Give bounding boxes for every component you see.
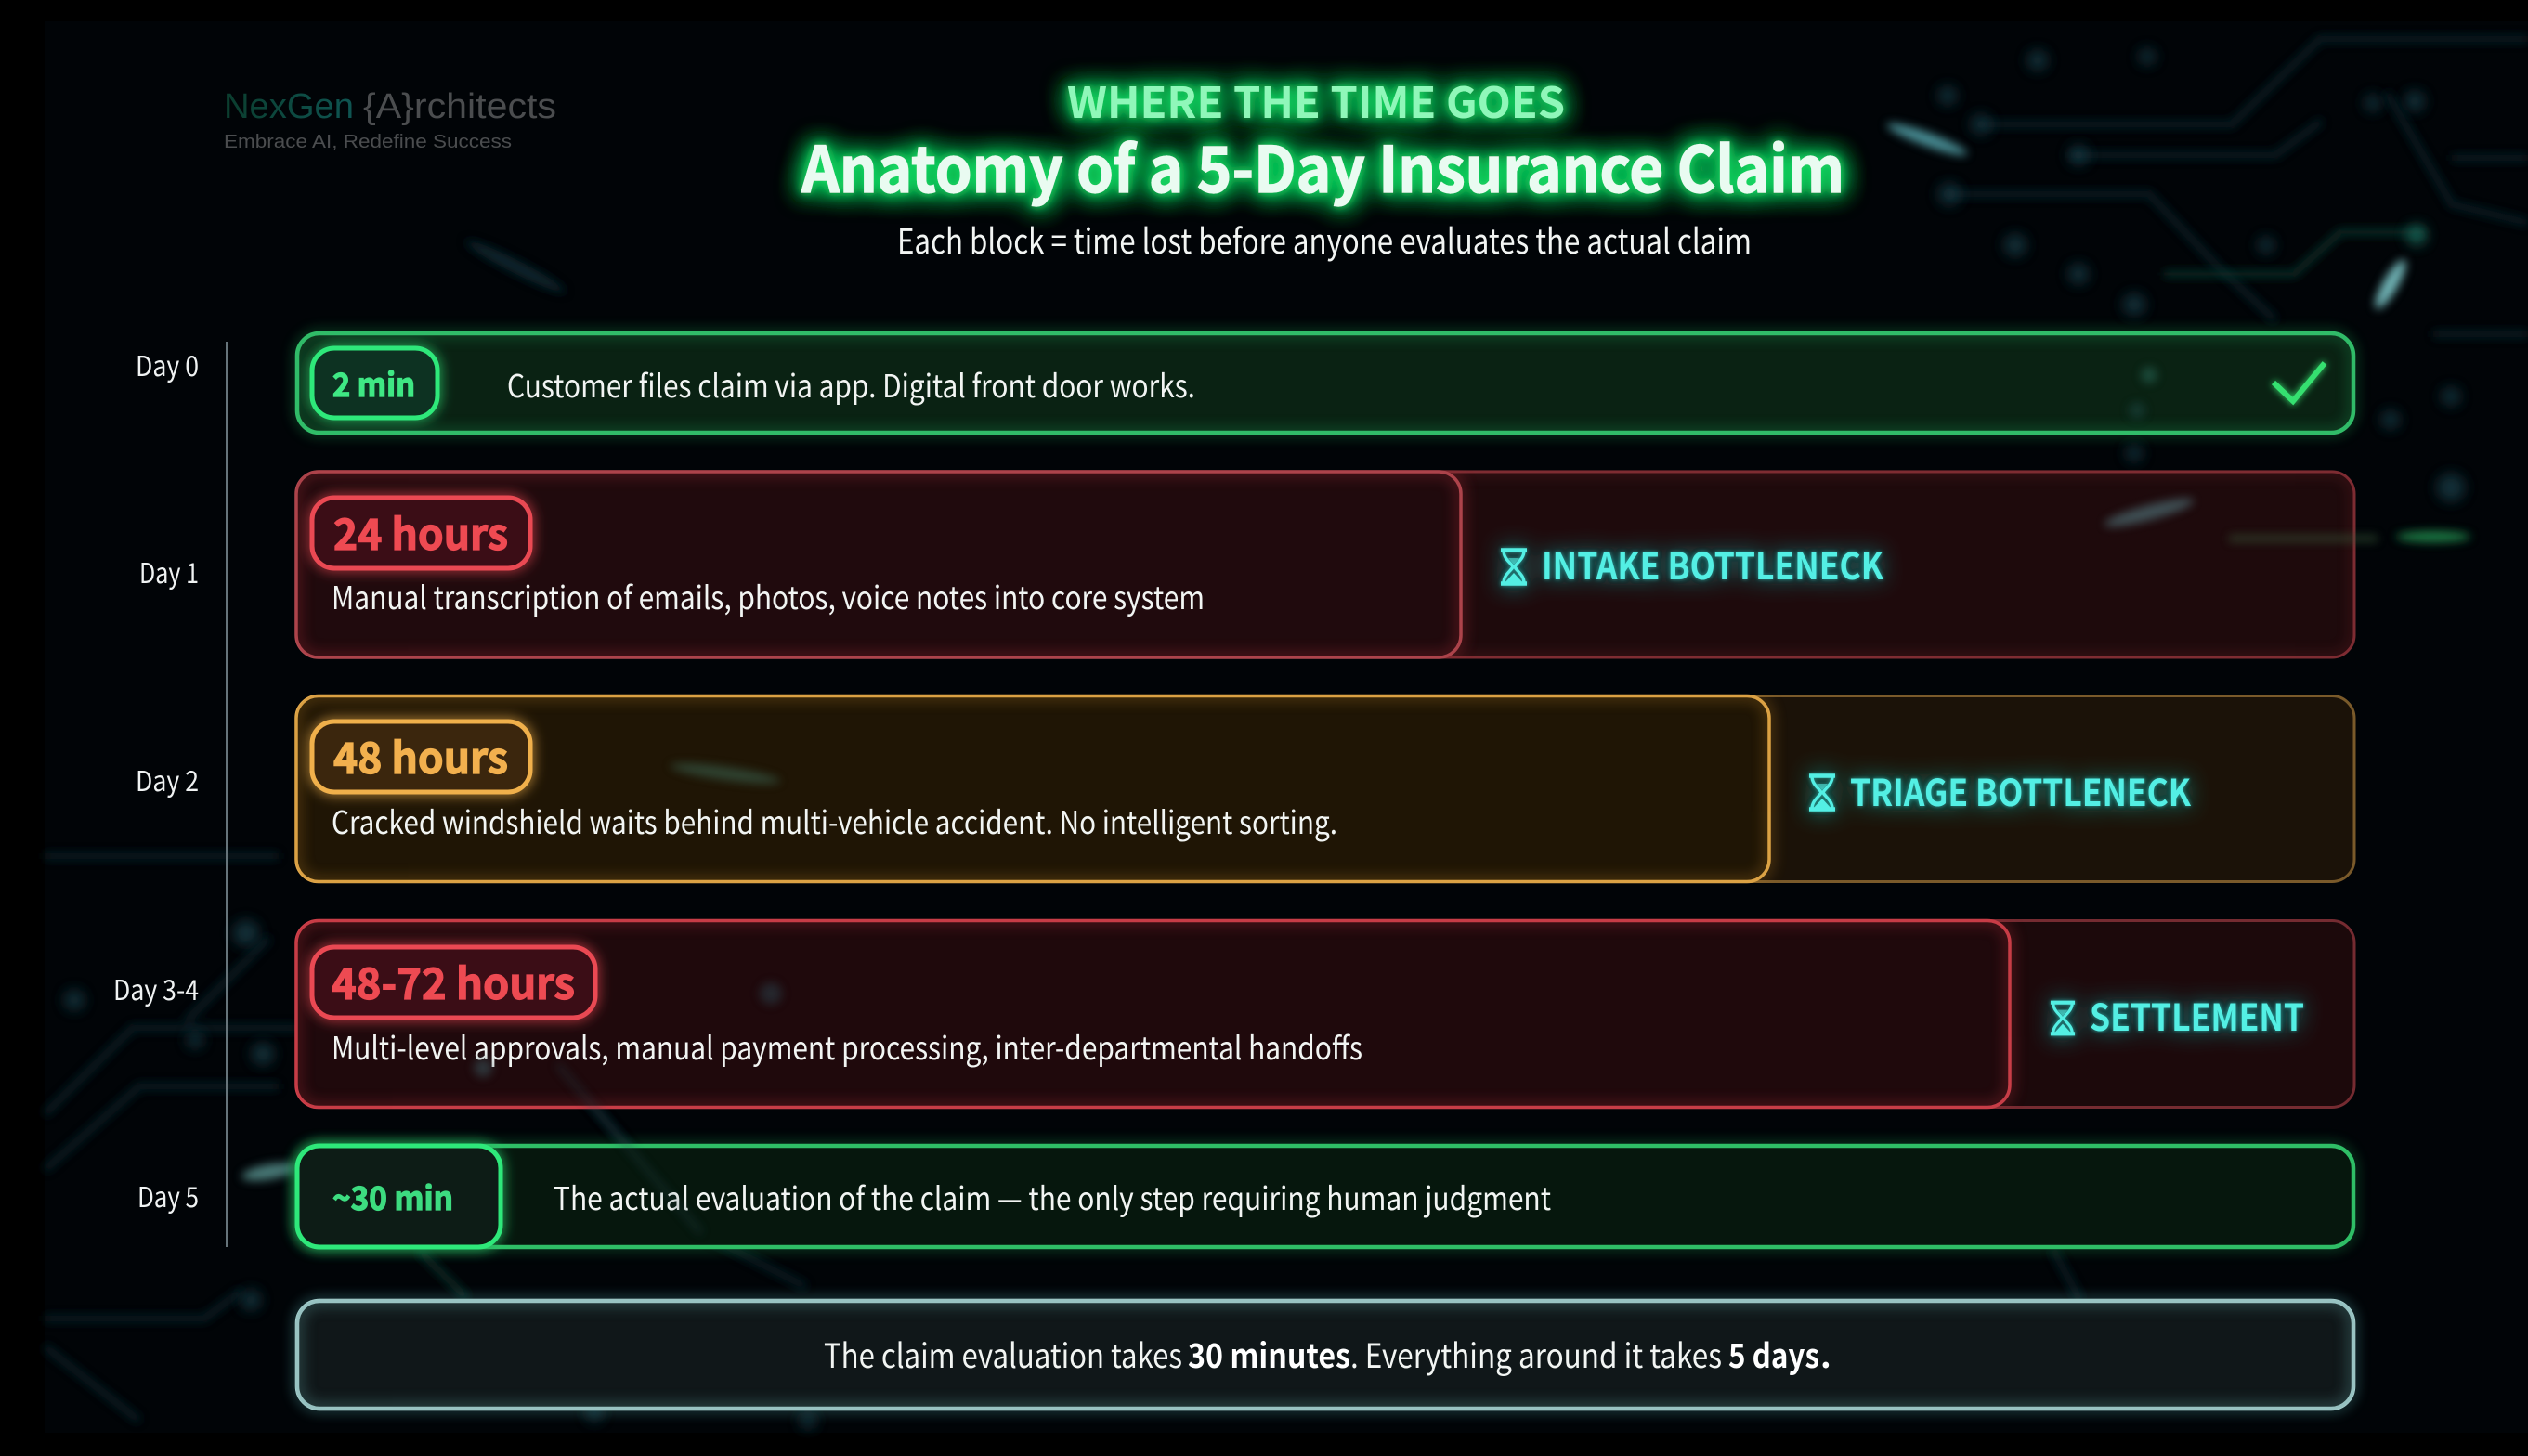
panel: day 5 actual evaluation [297, 1146, 2353, 1247]
callout: conclusion: . [1820, 1330, 1831, 1378]
description: Manual transcription of emails, photos, voice notes into core system [332, 573, 1205, 618]
badge: ~30 min: ~30 min [332, 1173, 453, 1220]
callout: conclusion: . Everything around it takes [1350, 1330, 1722, 1378]
logo: NexGen {A}rchitects: Embrace AI, Redefine Success [224, 132, 512, 152]
background traces showing through the panels [474, 367, 2378, 1233]
label: triage bottleneck: TRIAGE BOTTLENECK [1850, 763, 2191, 817]
day labels: Day 5 [137, 1175, 199, 1216]
label: intake bottleneck: INTAKE BOTTLENECK [1542, 537, 1883, 591]
panel: day 0 customer files claim [297, 333, 2353, 433]
time block: 48 hours [296, 696, 1769, 882]
badge: 24 hours: 24 hours [333, 501, 508, 563]
callout: conclusion [297, 1301, 2353, 1409]
day labels: Day 3-4 [113, 968, 199, 1008]
callout: conclusion: The claim evaluation takes [824, 1330, 1182, 1378]
logo: NexGen {A}rchitects [224, 87, 556, 152]
badge: 48-72 hours: 48-72 hours [332, 951, 575, 1012]
callout: conclusion: 30 minutes [1188, 1330, 1350, 1378]
subtitle: Each block = time lost before anyone evaluates the actual claim [897, 214, 1752, 264]
badge: 48 hours: 48 hours [333, 725, 508, 786]
description: Customer files claim via app. Digital front door works. [507, 361, 1195, 407]
day labels [113, 344, 199, 1216]
time block: 24 hours [296, 472, 1461, 657]
day labels: Day 2 [136, 759, 199, 800]
label: settlement: SETTLEMENT [2090, 988, 2304, 1042]
icon: check mark [2274, 363, 2325, 401]
timeline axis [226, 342, 228, 1247]
logo: NexGen {A}rchitects: NexGen [224, 87, 354, 126]
day labels: Day 0 [136, 344, 199, 384]
time block: 48-72 hours [296, 921, 2010, 1107]
panel: day 2 triage [296, 696, 2354, 882]
panel: day 3-4 settlement [296, 921, 2354, 1107]
description: Cracked windshield waits behind multi-vehicle accident. No intelligent sorting. [332, 798, 1337, 843]
badge: ~30 min [297, 1146, 501, 1247]
logo: NexGen {A}rchitects: {A}rchitects [363, 87, 556, 126]
callout: conclusion: 5 days [1728, 1330, 1819, 1378]
panel: day 1 manual intake [296, 472, 2354, 657]
day labels: Day 1 [139, 551, 199, 592]
heading: where the time goes: WHERE THE TIME GOES [1067, 70, 1565, 131]
description: The actual evaluation of the claim — the only step requiring human judgment [554, 1174, 1551, 1219]
badge: 2 min [312, 348, 437, 418]
description: Multi-level approvals, manual payment processing, inter-departmental handoffs [332, 1023, 1362, 1069]
title: Anatomy of a 5-Day Insurance Claim [801, 119, 1844, 211]
badge: 2 min: 2 min [332, 359, 415, 407]
